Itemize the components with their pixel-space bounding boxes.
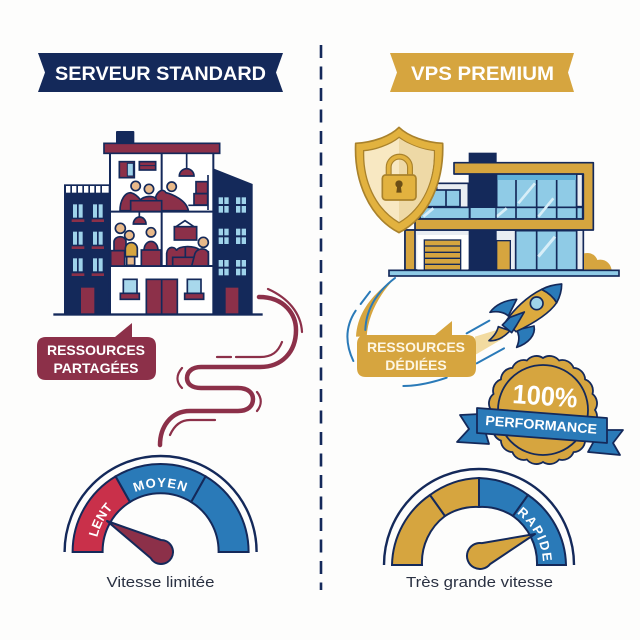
heading: vps premium: VPS PREMIUM [411,64,554,85]
rocket nozzle band [502,312,524,333]
caption: Vitesse limitée [106,574,214,591]
ground floor [120,279,204,314]
left tower [64,184,111,314]
rocket nose [542,284,562,303]
gauge segment: right [191,476,249,552]
gauge segment: gold left [392,495,445,565]
gauge segment: rapide [513,495,566,565]
swoosh trail [356,278,395,337]
callout: ressources partagées: PARTAGÉES [53,360,139,376]
garage door [424,240,461,270]
callout: ressources partagées: RESSOURCES [47,342,145,358]
chimney [116,131,134,144]
gauge segment: moyen [116,464,206,502]
ground line [53,313,263,316]
caption: Très grande vitesse [406,574,553,591]
shrub [584,253,612,270]
winding slow connection line [160,289,302,445]
gold frame [405,163,593,270]
flame [489,327,510,341]
heading: serveur standard [38,53,283,92]
upper right room with lamp and boxes [179,153,208,210]
roof [104,143,220,153]
callout: ressources dédiées [357,321,476,377]
callout: ressources dédiées: DÉDIÉES [385,357,447,373]
upper left room with people [119,162,188,211]
heading: serveur standard: SERVEUR STANDARD [55,64,266,85]
gauge segment: gold centre [430,478,479,516]
upper left wing [437,183,468,220]
entrance door [497,241,510,270]
illustration: modern villa [356,127,619,276]
rocket window [530,297,543,310]
callout: ressources dédiées: RESSOURCES [367,339,465,355]
callout: ressources partagées [37,323,156,380]
central block [110,153,213,314]
badge value: 100% [512,379,579,414]
gauge label: RAPIDE [517,506,552,561]
upper glazing [420,173,583,219]
illustration: rocket with trail [347,278,562,386]
ribbon tails [457,414,623,455]
needle [107,521,173,564]
gauge: slow speed [63,454,258,591]
heading: vps premium [390,53,574,92]
rocket body [506,289,557,332]
gauge segment: lent [73,476,130,552]
terrace slab [389,270,619,276]
lower right room with sofa [167,221,208,266]
lower glazing [516,231,577,270]
gauge labels: LENT [88,502,111,537]
dark column and chimney [469,153,497,270]
icon: security shield [356,127,443,233]
icon: padlock [382,157,416,200]
ribbon band [477,408,607,443]
illustration: shared apartment building [53,131,263,316]
gauge: fast speed [382,468,576,591]
rocket fins [490,299,534,347]
gauge segment: blue centre [479,478,528,516]
lower left room with people [111,212,161,266]
seal [489,356,597,464]
ribbon text: PERFORMANCE [485,413,598,437]
badge: 100% performance [457,356,623,464]
lower walls [405,230,583,270]
needle [467,534,535,569]
gauge: slow speed: MOYEN [133,478,188,492]
right tower [213,168,253,314]
